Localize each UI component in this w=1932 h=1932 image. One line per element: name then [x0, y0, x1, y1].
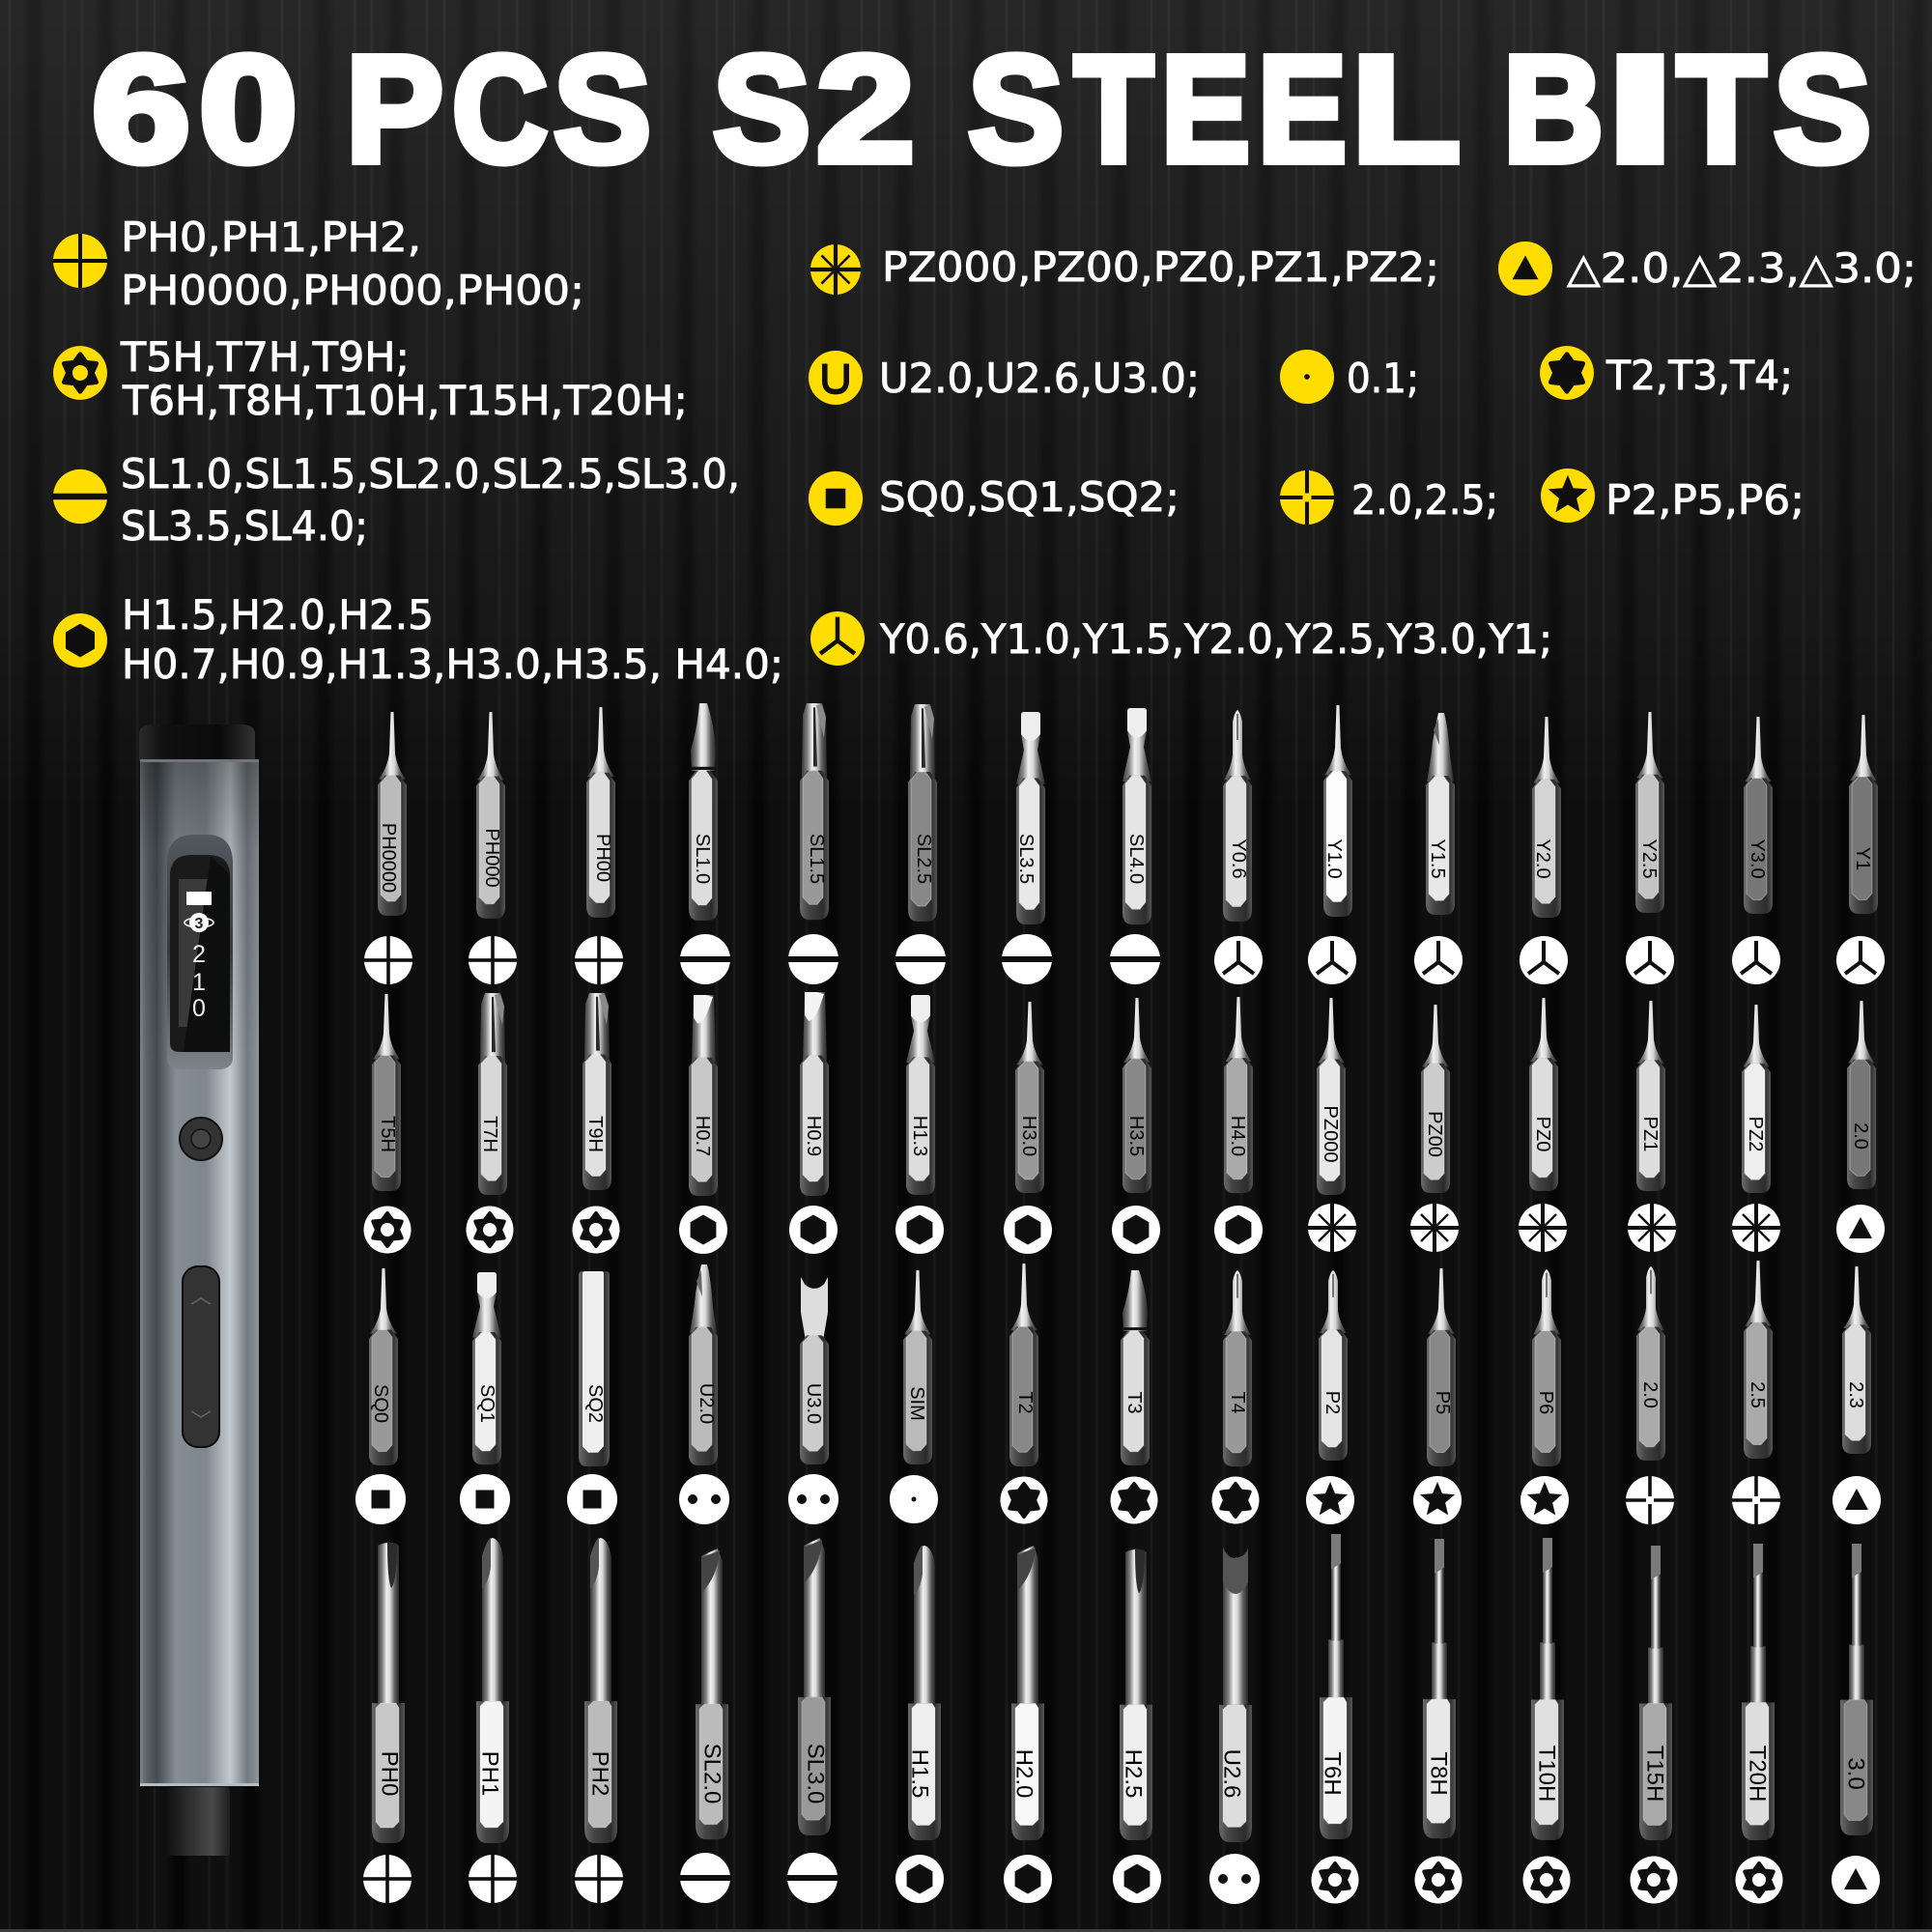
- bit: P2: [1306, 1270, 1354, 1524]
- bit: T8H: T8H: [1426, 1751, 1451, 1796]
- title: S: [968, 25, 1064, 194]
- screen levels: 2: [192, 941, 206, 968]
- bit: T20H: [1735, 1544, 1783, 1903]
- screen levels: [192, 941, 206, 1022]
- legend: H bits: H0.7,H0.9,H1.3,H3.0,H3.5, H4.0;: [122, 640, 783, 688]
- legend: Y bits: Y0.6,Y1.0,Y1.5,Y2.0,Y2.5,Y3.0,Y1;: [879, 615, 1552, 663]
- legend: PH bits: [53, 213, 584, 314]
- legend: T-H bits: T6H,T8H,T10H,T15H,T20H;: [122, 377, 688, 424]
- bit: triangle 2.0: [1836, 1001, 1885, 1253]
- screen levels: 1: [192, 969, 206, 996]
- row 2 bits: [363, 992, 1885, 1254]
- bit: SL4.0: [1109, 708, 1161, 984]
- bit: H2.0: [1004, 1546, 1052, 1903]
- legend: PH bits: PH0,PH1,PH2,: [121, 213, 421, 261]
- bit: triangle 3.0: 3.0: [1843, 1757, 1868, 1790]
- legend: PH bits: PH0000,PH000,PH00;: [121, 267, 584, 314]
- bit: T10H: T10H: [1534, 1746, 1559, 1802]
- bit: U2.0: [679, 1264, 729, 1524]
- bit: SL1.5: [787, 703, 839, 984]
- bit: T6H: T6H: [1320, 1751, 1345, 1796]
- bit: Y0.6: Y0.6: [1228, 838, 1249, 879]
- legend: T bits: [1540, 346, 1793, 400]
- bit: SIM: [890, 1270, 938, 1523]
- bit: H0.9: H0.9: [803, 1116, 824, 1156]
- bit: T3: T3: [1123, 1391, 1145, 1414]
- bit: T9H: T9H: [584, 1116, 606, 1152]
- title: E: [1258, 25, 1347, 194]
- bit: SL3.5: [1001, 712, 1053, 984]
- bit: PZ000: [1308, 998, 1356, 1252]
- bit: SL2.5: SL2.5: [913, 834, 934, 884]
- bit: H1.3: [895, 995, 944, 1254]
- bit: H3.5: H3.5: [1125, 1116, 1147, 1156]
- legend: cross 2.0 2.5 bits: [1280, 470, 1498, 525]
- bit: SL1.0: [679, 703, 731, 984]
- bit: SL3.5: SL3.5: [1015, 834, 1037, 884]
- bit: T15H: T15H: [1642, 1746, 1667, 1802]
- bit: H4.0: [1214, 997, 1263, 1254]
- bit: PZ1: [1628, 1001, 1676, 1252]
- bit: SQ2: [567, 1271, 617, 1524]
- title: S: [713, 25, 810, 194]
- row 3 bits: [355, 1261, 1881, 1524]
- bit: PH0000: PH0000: [378, 823, 399, 893]
- bit: PH0000: [364, 712, 412, 984]
- bit: H3.0: [1004, 1002, 1052, 1254]
- screen icon: battery: [186, 892, 212, 905]
- bit: PZ1: PZ1: [1639, 1117, 1661, 1151]
- bit: SL1.5: SL1.5: [806, 834, 827, 884]
- bit: SL2.0: SL2.0: [699, 1744, 724, 1804]
- bit: Y2.0: [1520, 717, 1568, 984]
- legend: P bits: P2,P5,P6;: [1605, 476, 1804, 524]
- bit: Y1: [1836, 715, 1885, 984]
- bit: T2: T2: [1014, 1391, 1036, 1414]
- bit: cross 2.0: 2.0: [1639, 1381, 1661, 1408]
- bit: H3.0: H3.0: [1018, 1116, 1039, 1156]
- bit: T10H: [1522, 1538, 1571, 1903]
- bit: P5: P5: [1432, 1391, 1453, 1414]
- bit: P6: P6: [1535, 1391, 1556, 1414]
- bit: PH000: [469, 712, 517, 984]
- title: T: [1074, 25, 1153, 194]
- bit: SQ1: [460, 1272, 510, 1524]
- title: E: [1161, 25, 1250, 194]
- bit: T15H: [1631, 1546, 1677, 1903]
- bit: SQ0: SQ0: [370, 1384, 391, 1423]
- bit: Y1.5: [1414, 713, 1463, 984]
- title: S: [1774, 25, 1871, 194]
- screen levels: 0: [192, 995, 206, 1022]
- legend: H bits: [53, 591, 783, 688]
- bit: SIM: SIM: [906, 1386, 927, 1421]
- bit: triangle 2.3: [1833, 1266, 1881, 1524]
- bit: PH000: PH000: [481, 828, 502, 888]
- bit: T20H: T20H: [1745, 1746, 1770, 1802]
- bit: H4.0: H4.0: [1227, 1116, 1248, 1156]
- title: C: [452, 25, 548, 194]
- bit: PH00: PH00: [592, 834, 613, 882]
- bit: PH1: PH1: [477, 1751, 502, 1796]
- bit: H2.5: [1113, 1548, 1161, 1903]
- title: [92, 25, 1871, 194]
- bit: T9H: [572, 993, 620, 1254]
- bit: T4: [1211, 1270, 1260, 1524]
- bit: Y1.5: Y1.5: [1427, 838, 1448, 879]
- title: L: [1351, 25, 1461, 194]
- bit: H1.3: H1.3: [909, 1116, 930, 1156]
- title: 2: [816, 25, 915, 194]
- legend: 0.1 bit: [1280, 350, 1419, 404]
- bit: cross 2.5: 2.5: [1747, 1381, 1768, 1408]
- legend: triangle bits: [1498, 242, 1917, 296]
- title: P: [346, 25, 443, 194]
- bit: cross 2.0: [1626, 1266, 1674, 1524]
- bit: H2.0: H2.0: [1010, 1749, 1037, 1798]
- bit: triangle 3.0: [1832, 1544, 1880, 1904]
- bit: U3.0: U3.0: [803, 1383, 824, 1424]
- title: 6: [92, 25, 190, 194]
- bit: SQ1: SQ1: [476, 1384, 497, 1423]
- bit: T5H: T5H: [377, 1116, 398, 1152]
- bit: PZ00: PZ00: [1424, 1111, 1445, 1157]
- bit: H1.5: H1.5: [906, 1749, 933, 1798]
- bit: P5: [1413, 1268, 1462, 1524]
- bit: triangle 2.3: 2.3: [1845, 1381, 1866, 1408]
- bit: SQ2: SQ2: [584, 1384, 606, 1423]
- bit: SL1.0: SL1.0: [692, 834, 713, 884]
- bit: PZ0: [1519, 998, 1567, 1252]
- row 4 bits: [363, 1534, 1880, 1904]
- bit: T4: T4: [1227, 1391, 1248, 1414]
- bit: Y2.5: Y2.5: [1638, 838, 1660, 879]
- bit: PZ2: PZ2: [1745, 1117, 1766, 1151]
- bit: PH0: PH0: [377, 1751, 402, 1796]
- legend: H bits: H1.5,H2.0,H2.5: [122, 591, 434, 639]
- bit: PZ00: [1410, 1005, 1459, 1252]
- legend: triangle bits: △2.0,△2.3,△3.0;: [1567, 244, 1917, 292]
- bit: P6: [1520, 1269, 1569, 1524]
- bit: T6H: [1312, 1534, 1358, 1903]
- bit: PZ0: PZ0: [1532, 1117, 1553, 1151]
- bit: H0.7: [679, 995, 727, 1254]
- legend: SQ bits: SQ0,SQ1,SQ2;: [879, 473, 1179, 521]
- bit: H3.5: [1112, 998, 1160, 1254]
- bit: H0.7: H0.7: [692, 1116, 713, 1156]
- screen level 3: 3: [195, 916, 204, 932]
- bit: T3: [1111, 1270, 1157, 1524]
- bit: SL3.0: SL3.0: [802, 1744, 829, 1804]
- bit: H2.5: H2.5: [1121, 1749, 1146, 1798]
- legend: SL bits: SL3.5,SL4.0;: [121, 502, 368, 550]
- bit: SL3.0: [786, 1538, 838, 1903]
- bit: H1.5: [895, 1546, 944, 1903]
- bit: PZ000: PZ000: [1320, 1106, 1341, 1162]
- title: S: [554, 25, 651, 194]
- bit: T7H: T7H: [479, 1116, 500, 1152]
- bit: Y0.6: [1214, 710, 1263, 984]
- bit: U2.0: U2.0: [696, 1383, 717, 1424]
- bit: Y2.0: Y2.0: [1532, 838, 1553, 879]
- legend: SL bits: SL1.0,SL1.5,SL2.0,SL2.5,SL3.0,: [121, 450, 740, 497]
- legend: SL bits: [52, 450, 740, 550]
- bit: PZ2: [1732, 1005, 1780, 1252]
- bit: SL4.0: SL4.0: [1125, 834, 1147, 884]
- bit: U2.6: [1209, 1547, 1260, 1904]
- bit: SL2.5: [895, 704, 947, 984]
- bit: Y3.0: [1732, 717, 1780, 984]
- legend: T-H bits: T5H,T7H,T9H;: [120, 333, 410, 381]
- row 1 bits: [364, 703, 1885, 984]
- legend: PZ bits: PZ000,PZ00,PZ0,PZ1,PZ2;: [882, 243, 1439, 291]
- title: T: [1677, 25, 1766, 194]
- bit: PH0: [363, 1542, 412, 1903]
- electric screwdriver: [139, 724, 259, 1856]
- bit: Y1: Y1: [1852, 847, 1873, 870]
- bit: Y3.0: Y3.0: [1747, 838, 1768, 879]
- power button: [180, 1118, 222, 1160]
- legend: P bits: [1541, 469, 1804, 524]
- legend: T-H bits: [53, 333, 688, 424]
- bit: SL2.0: [679, 1548, 731, 1903]
- bit: PH1: [469, 1538, 517, 1903]
- bit: T5H: [363, 994, 412, 1254]
- bit: PH2: [575, 1538, 623, 1903]
- bit: T7H: [466, 993, 514, 1254]
- bit: U3.0: [788, 1277, 838, 1524]
- screen level 3: [185, 913, 213, 932]
- legend: U bits: U2.0,U2.6,U3.0;: [879, 355, 1200, 402]
- rocker button: [183, 1266, 219, 1447]
- bit: H0.9: [789, 992, 838, 1254]
- bit: P2: P2: [1321, 1391, 1343, 1414]
- bit: T8H: [1414, 1539, 1463, 1903]
- bit: PH00: [575, 707, 623, 984]
- title: B: [1503, 25, 1604, 194]
- bit: U2.6: U2.6: [1219, 1749, 1244, 1798]
- bit: PH2: PH2: [587, 1751, 612, 1796]
- legend: T bits: T2,T3,T4;: [1605, 352, 1793, 399]
- bit: triangle 2.0: 2.0: [1850, 1122, 1871, 1150]
- title: I: [1606, 25, 1674, 194]
- bit: T2: [1001, 1264, 1047, 1524]
- bit: Y1.0: [1308, 705, 1356, 984]
- legend: cross 2.0 2.5 bits: 2.0,2.5;: [1351, 476, 1498, 524]
- bit: SQ0: [355, 1268, 406, 1524]
- title: 0: [199, 25, 298, 194]
- bit: cross 2.5: [1732, 1261, 1780, 1524]
- legend: SQ bits: [809, 471, 1179, 526]
- legend: 0.1 bit: 0.1;: [1347, 355, 1419, 402]
- bit: Y1.0: Y1.0: [1323, 838, 1345, 879]
- bit: Y2.5: [1626, 712, 1674, 984]
